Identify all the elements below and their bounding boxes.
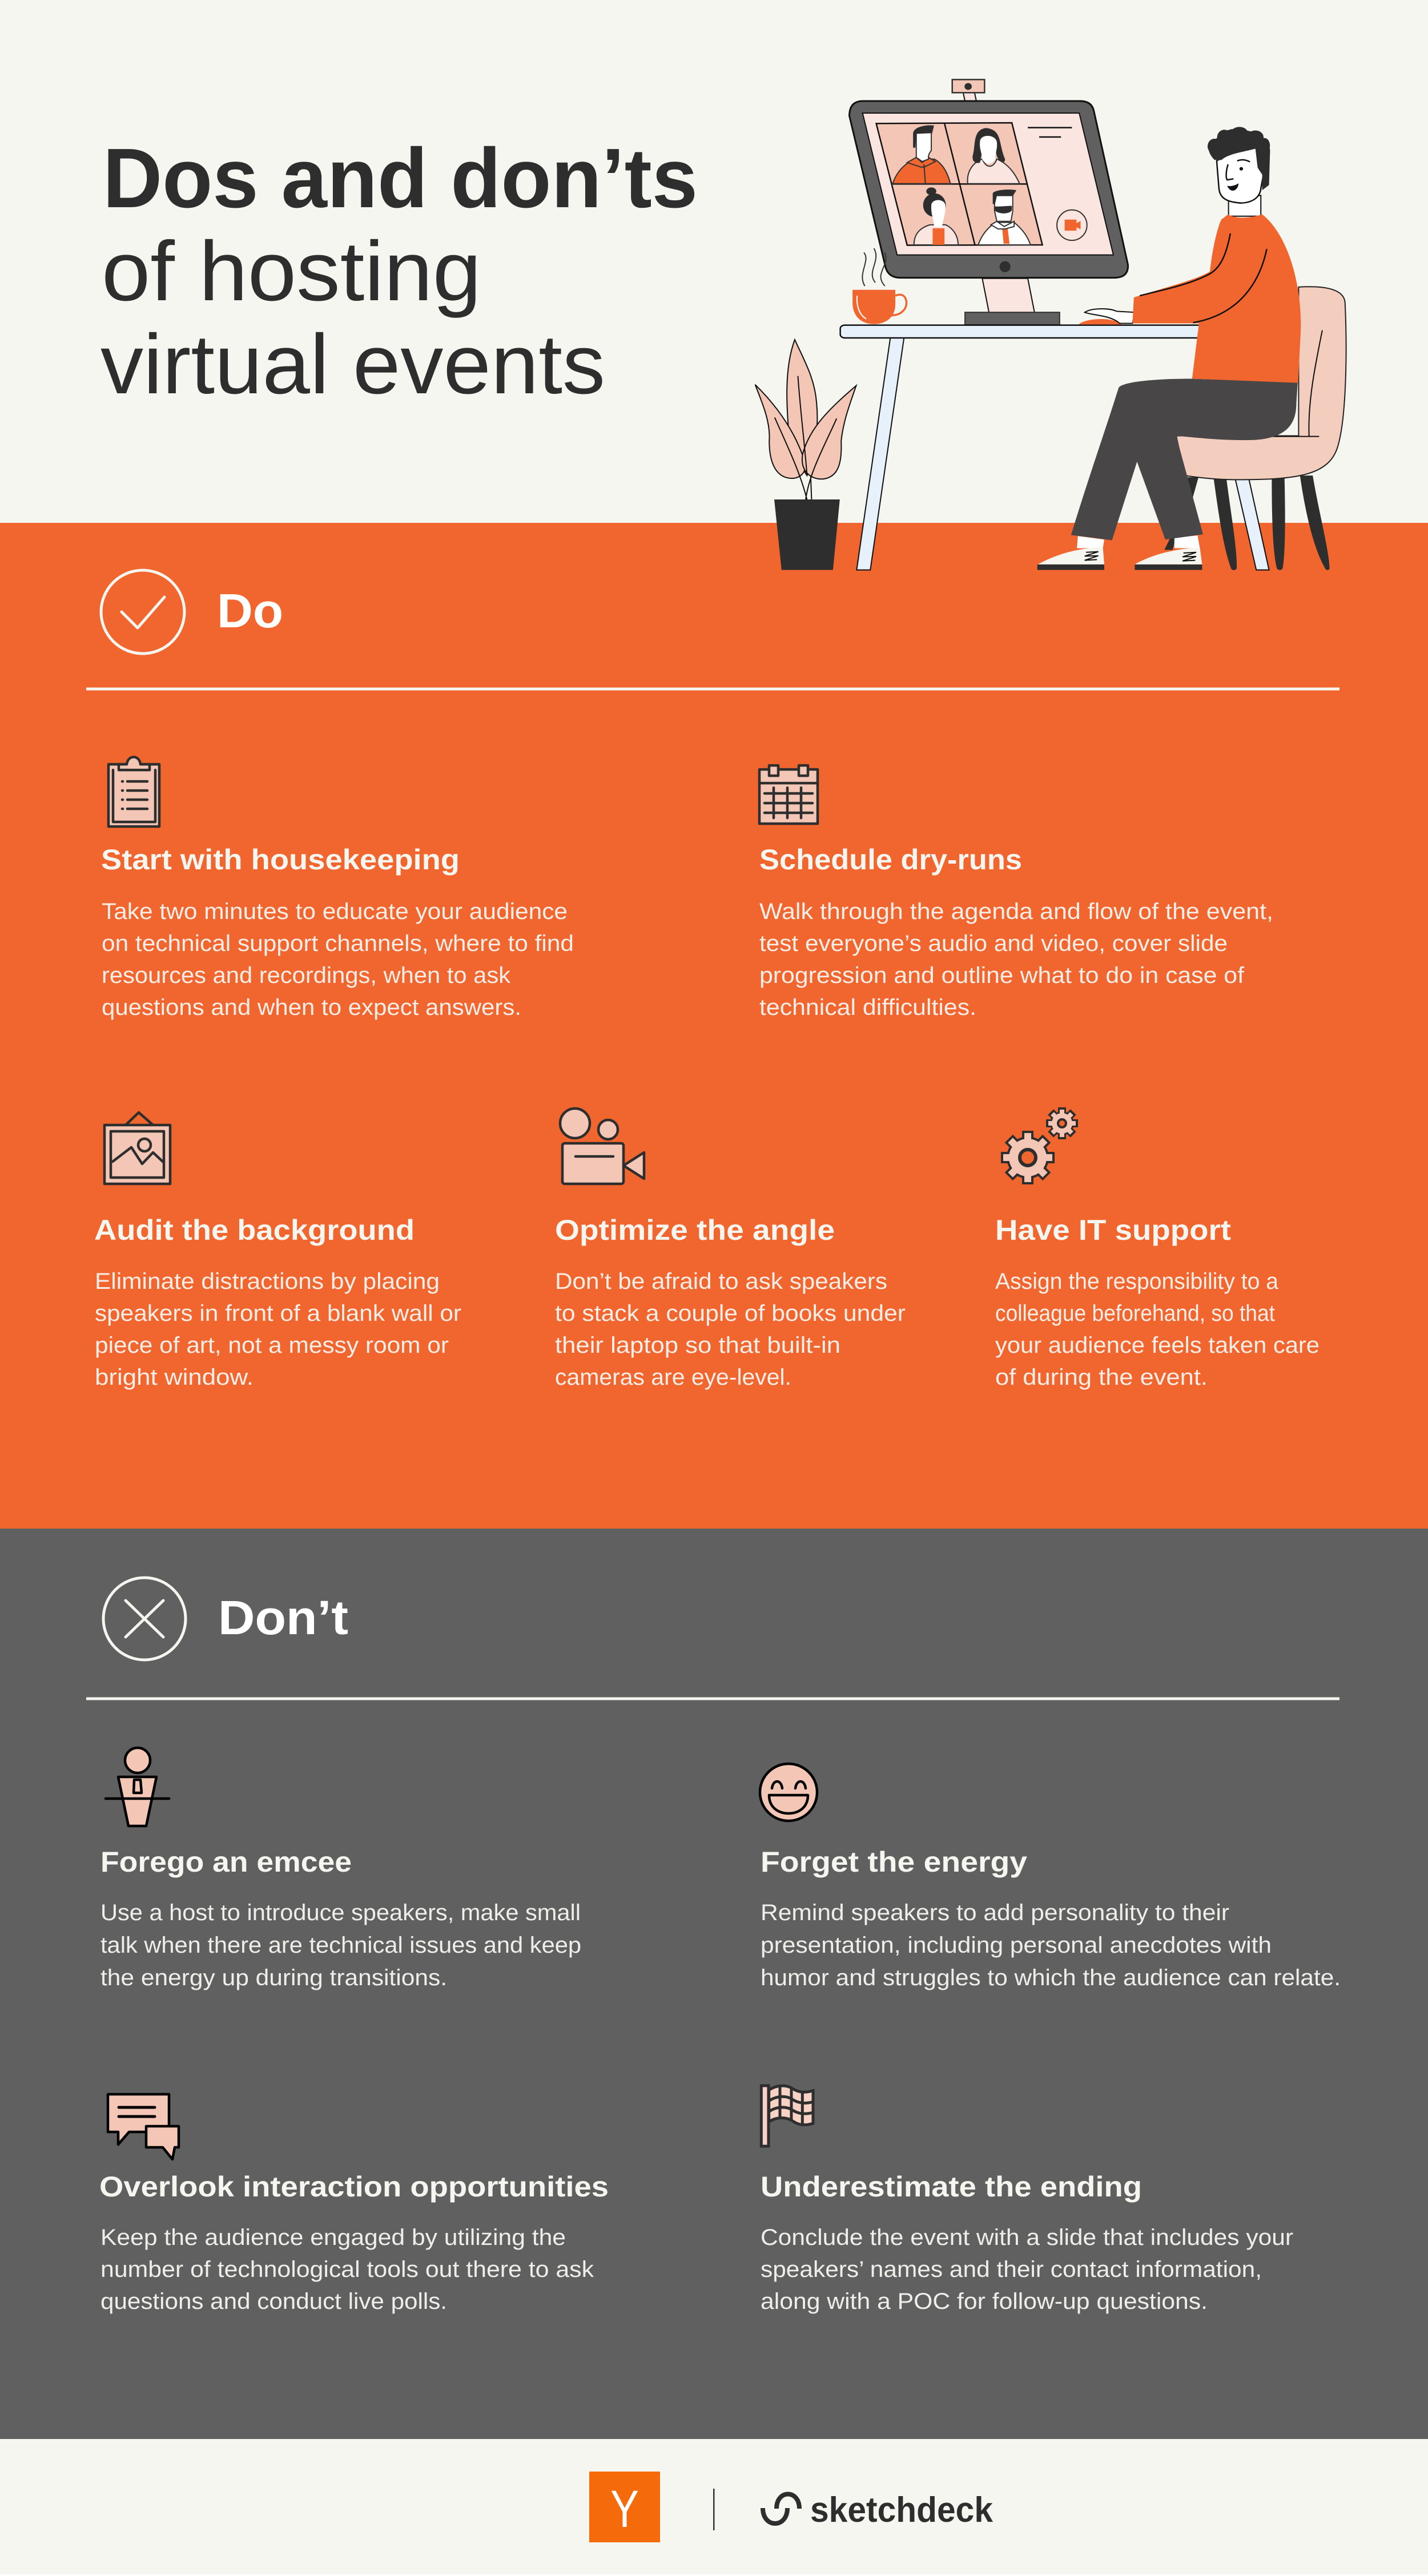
body text: progression and outline what to do in case of (759, 963, 1245, 988)
illustration: man at desk on a video call (755, 79, 1346, 570)
desk (840, 325, 1204, 338)
icon: laughing face (760, 1764, 817, 1821)
body text: Don’t be afraid to ask speakers (555, 1269, 887, 1294)
body text: Use a host to introduce speakers, make small (100, 1900, 581, 1925)
heading: Don't: Don’t (218, 1591, 348, 1644)
icon: X circle (103, 1578, 186, 1660)
body text: bright window. (95, 1365, 254, 1390)
heading: Optimize the angle (555, 1214, 835, 1246)
body text: speakers’ names and their contact information, (761, 2257, 1262, 2282)
item: Schedule dry-runs (759, 765, 1273, 1020)
body text: Keep the audience engaged by utilizing the (100, 2225, 566, 2250)
item: Optimize the angle (555, 1108, 906, 1390)
body text: presentation, including personal anecdotes with (761, 1933, 1272, 1958)
icon: check mark circle (101, 570, 184, 654)
item: Start with housekeeping (101, 757, 574, 1020)
title: virtual events (100, 317, 605, 412)
body text (995, 1269, 1320, 1390)
body text: resources and recordings, when to ask (102, 963, 511, 988)
title: of hosting (102, 224, 481, 319)
plant (755, 340, 856, 570)
icon: film camera (560, 1108, 644, 1184)
heading: Underestimate the ending (761, 2171, 1142, 2203)
body text (102, 899, 574, 1020)
icon: emcee at podium (106, 1748, 169, 1826)
body text: Remind speakers to add personality to their (761, 1900, 1229, 1925)
heading: Have IT support (995, 1214, 1231, 1246)
footer (0, 2439, 1428, 2574)
title: Dos and don’ts (103, 131, 698, 225)
item: Overlook interaction opportunities (99, 2094, 609, 2314)
item: Forget the energy (760, 1764, 1341, 1990)
heading: Start with housekeeping (101, 844, 460, 876)
icon: framed picture (104, 1112, 170, 1184)
item: Forego an emcee (100, 1748, 581, 1990)
item: Audit the background (94, 1112, 461, 1390)
body text: to stack a couple of books under (555, 1301, 906, 1326)
body text (761, 1900, 1341, 1990)
body text: on technical support channels, where to find (102, 931, 574, 956)
body text: Assign the responsibility to a (995, 1269, 1279, 1294)
coffee mug (852, 248, 907, 324)
body text: Walk through the agenda and flow of the event, (759, 899, 1273, 924)
body text: Take two minutes to educate your audience (102, 899, 568, 924)
chair (1176, 287, 1346, 479)
body text: questions and conduct live polls. (100, 2289, 447, 2314)
chair legs (1164, 475, 1330, 570)
heading: Forego an emcee (100, 1846, 352, 1878)
body text: of during the event. (995, 1365, 1208, 1390)
heading: Audit the background (94, 1214, 415, 1246)
body text: technical difficulties. (759, 995, 976, 1020)
body text (555, 1269, 906, 1390)
icon: calendar (759, 765, 818, 824)
heading: Schedule dry-runs (759, 844, 1022, 876)
body text: your audience feels taken care (995, 1333, 1320, 1358)
body text: speakers in front of a blank wall or (95, 1301, 461, 1326)
item: Have IT support (995, 1107, 1320, 1390)
body text (761, 2225, 1293, 2314)
body text: the energy up during transitions. (100, 1965, 447, 1990)
item: Underestimate the ending (761, 2086, 1293, 2314)
body text: number of technological tools out there to ask (100, 2257, 594, 2282)
heading: Do: Do (217, 584, 283, 638)
body text: test everyone’s audio and video, cover slide (759, 931, 1228, 956)
heading: Forget the energy (761, 1846, 1027, 1878)
body text: questions and when to expect answers. (102, 995, 521, 1020)
title (100, 131, 698, 412)
mouse and hand (1079, 309, 1135, 324)
body text (759, 899, 1273, 1020)
icon: gears (1001, 1107, 1078, 1184)
body text: Eliminate distractions by placing (95, 1269, 440, 1294)
logo: sketchdeck: sketchdeck (810, 2490, 993, 2530)
body text: talk when there are technical issues and keep (100, 1933, 581, 1958)
body text (95, 1269, 461, 1390)
man (1037, 127, 1301, 570)
panel: Don't (0, 1529, 1428, 2439)
body text (100, 2225, 594, 2314)
video call participants (892, 125, 1031, 245)
heading: Overlook interaction opportunities (99, 2171, 609, 2203)
logo: Y Combinator: Y (610, 2480, 639, 2538)
icon: checkered flag (761, 2086, 813, 2146)
body text: Conclude the event with a slide that includes your (761, 2225, 1293, 2250)
body text: piece of art, not a messy room or (95, 1333, 449, 1358)
body text (100, 1900, 581, 1990)
body text: along with a POC for follow-up questions. (761, 2289, 1208, 2314)
body text: cameras are eye-level. (555, 1365, 791, 1390)
logo: Y Combinator (589, 2472, 660, 2542)
icon: chat bubbles (108, 2094, 179, 2159)
body text: humor and struggles to which the audience can relate. (761, 1965, 1341, 1990)
body text: colleague beforehand, so that (995, 1301, 1275, 1326)
monitor (850, 79, 1128, 325)
desk legs (856, 338, 1269, 570)
icon: clipboard (108, 757, 159, 827)
panel: Do (0, 523, 1428, 1529)
body text: their laptop so that built-in (555, 1333, 840, 1358)
